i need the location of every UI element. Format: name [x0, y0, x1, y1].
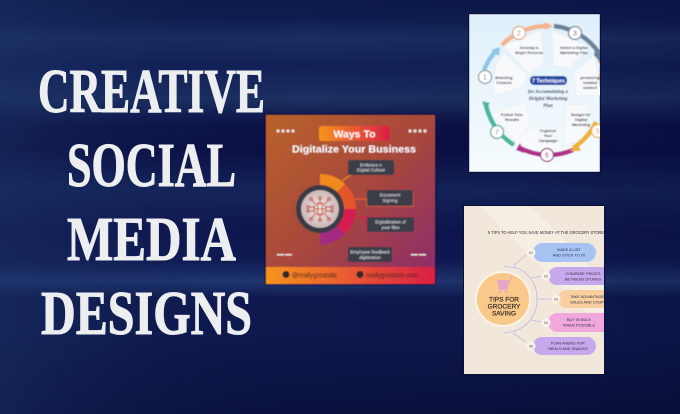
center title: Helpful Marketing — [528, 97, 568, 102]
callout: digitalization of your files — [367, 217, 414, 232]
connector curve — [504, 255, 552, 342]
panel border: tips — [463, 205, 605, 375]
tip circle — [475, 271, 531, 327]
tip pill 03: SALES AND COUPONS — [570, 300, 613, 304]
step number circles — [478, 26, 612, 162]
footer bar: reallygreatsite.com — [366, 272, 418, 280]
tip pill 03: 03 — [554, 298, 558, 302]
step labels: producing — [580, 75, 600, 80]
decorative dots, top right — [408, 129, 427, 133]
callout: document signing: Document — [380, 192, 401, 198]
callout: embrace a digital culture: Digital Culture — [357, 168, 386, 172]
step labels: Choices — [496, 80, 512, 85]
callout: employee feedback digitization: digitization — [359, 255, 381, 260]
tip pill 02: 02 — [544, 274, 548, 278]
ring arrows — [484, 26, 607, 155]
callout: employee feedback digitization: Employee feedback — [350, 250, 391, 254]
step labels: Marketing — [572, 122, 591, 127]
decorative dashes — [277, 254, 426, 256]
callout: document signing — [367, 190, 413, 206]
heading pill: Ways To — [333, 128, 376, 140]
tip pill 01 — [526, 243, 596, 262]
panel border: 7 techniques — [468, 13, 601, 173]
icon: digital globe — [296, 185, 344, 233]
center title — [528, 76, 569, 109]
tip pill 05 — [526, 337, 596, 355]
step labels: Your — [544, 133, 553, 138]
title: creative social media designs — [38, 58, 265, 348]
callout: embrace a digital culture: Embrace A — [360, 162, 382, 168]
title: creative social media designs: DESIGNS — [41, 280, 252, 348]
heading: Digitalize Your Business — [292, 144, 416, 156]
arrowheads — [482, 22, 601, 153]
step number circles: 5 — [596, 128, 600, 136]
tip pill 02: BETWEEN STORES — [565, 276, 602, 282]
tip pill 01: AND STICK TO IT! — [553, 252, 585, 258]
callout: digitalization of your files: Digitalization of — [375, 220, 407, 224]
step labels: Organize — [540, 128, 557, 133]
heading: 5 TIPS TO HELP YOU SAVE MONEY AT THE GROCERY STORE — [488, 230, 604, 235]
step labels: Buyer Persona — [515, 50, 544, 55]
decorative dots, top left — [276, 129, 295, 133]
step labels: Branding — [495, 75, 513, 80]
step number circles: 3 — [573, 30, 577, 38]
step labels: Results — [505, 117, 519, 122]
step number circles: 1 — [483, 74, 487, 82]
step labels: Budget for — [571, 112, 591, 117]
callout: document signing: Signing — [382, 198, 398, 203]
tip pill 01: 01 — [529, 251, 533, 255]
center title: Plan — [543, 104, 553, 109]
step labels: Marketing Plan — [560, 50, 588, 55]
title: creative social media designs: MEDIA — [67, 206, 236, 274]
heading pill — [319, 126, 390, 141]
tip pill 04: BUY IN BULK — [567, 317, 591, 322]
tip pill 01: MAKE A LIST — [557, 247, 581, 252]
center title: 7 Techniques — [532, 78, 565, 84]
tip pill 03 — [552, 290, 604, 308]
petal cards — [491, 30, 602, 152]
panel: tips for grocery saving — [464, 206, 618, 374]
callout: employee feedback digitization — [348, 247, 392, 262]
tip pill 02 — [542, 267, 604, 285]
panel: ways to digitalize your business — [265, 114, 436, 285]
step number circles: 6 — [545, 152, 549, 160]
tip pill 04: WHEN POSSIBLE — [563, 322, 596, 328]
tip pill 05: PLAN AHEAD FOR — [551, 340, 585, 346]
step labels — [495, 45, 600, 143]
step labels: Select a Digital — [560, 45, 588, 50]
tip circle: GROCERY — [488, 304, 521, 310]
tip circle: SAVING — [492, 310, 516, 318]
footer bar: @reallygreatsite — [292, 272, 337, 280]
tip pill 04 — [542, 313, 604, 332]
step labels: Campaign — [539, 138, 558, 143]
icon: shopping cart — [497, 276, 512, 293]
callout: digitalization of your files: your files — [381, 225, 400, 230]
tip circle: TIPS FOR — [489, 296, 519, 304]
title: creative social media designs: SOCIAL — [67, 132, 236, 200]
tip pill 04: 04 — [544, 321, 548, 325]
step number circles: 7 — [495, 130, 499, 136]
tip pill 05: MEALS AND SNACKS — [548, 346, 588, 351]
step number circles: 2 — [517, 30, 521, 38]
tip pill 05: 05 — [529, 344, 533, 348]
footer bar — [266, 267, 435, 284]
title: creative social media designs: CREATIVE — [38, 58, 265, 126]
center title: for Accumulating a — [528, 90, 569, 95]
semicircle segments — [320, 174, 356, 245]
step labels: content — [583, 85, 598, 90]
tip pill 03: TAKE ADVANTAGE OF — [570, 294, 611, 299]
callout: embrace a digital culture — [348, 160, 394, 175]
panel: 7 techniques ring — [469, 14, 612, 172]
step labels: curated — [583, 80, 598, 85]
step labels: Digital — [575, 117, 587, 122]
step labels: Develop a — [520, 45, 539, 50]
step labels: Follow Your — [501, 112, 523, 117]
connector lines — [342, 160, 414, 232]
tip pill 02: COMPARE PRICES — [566, 271, 601, 276]
